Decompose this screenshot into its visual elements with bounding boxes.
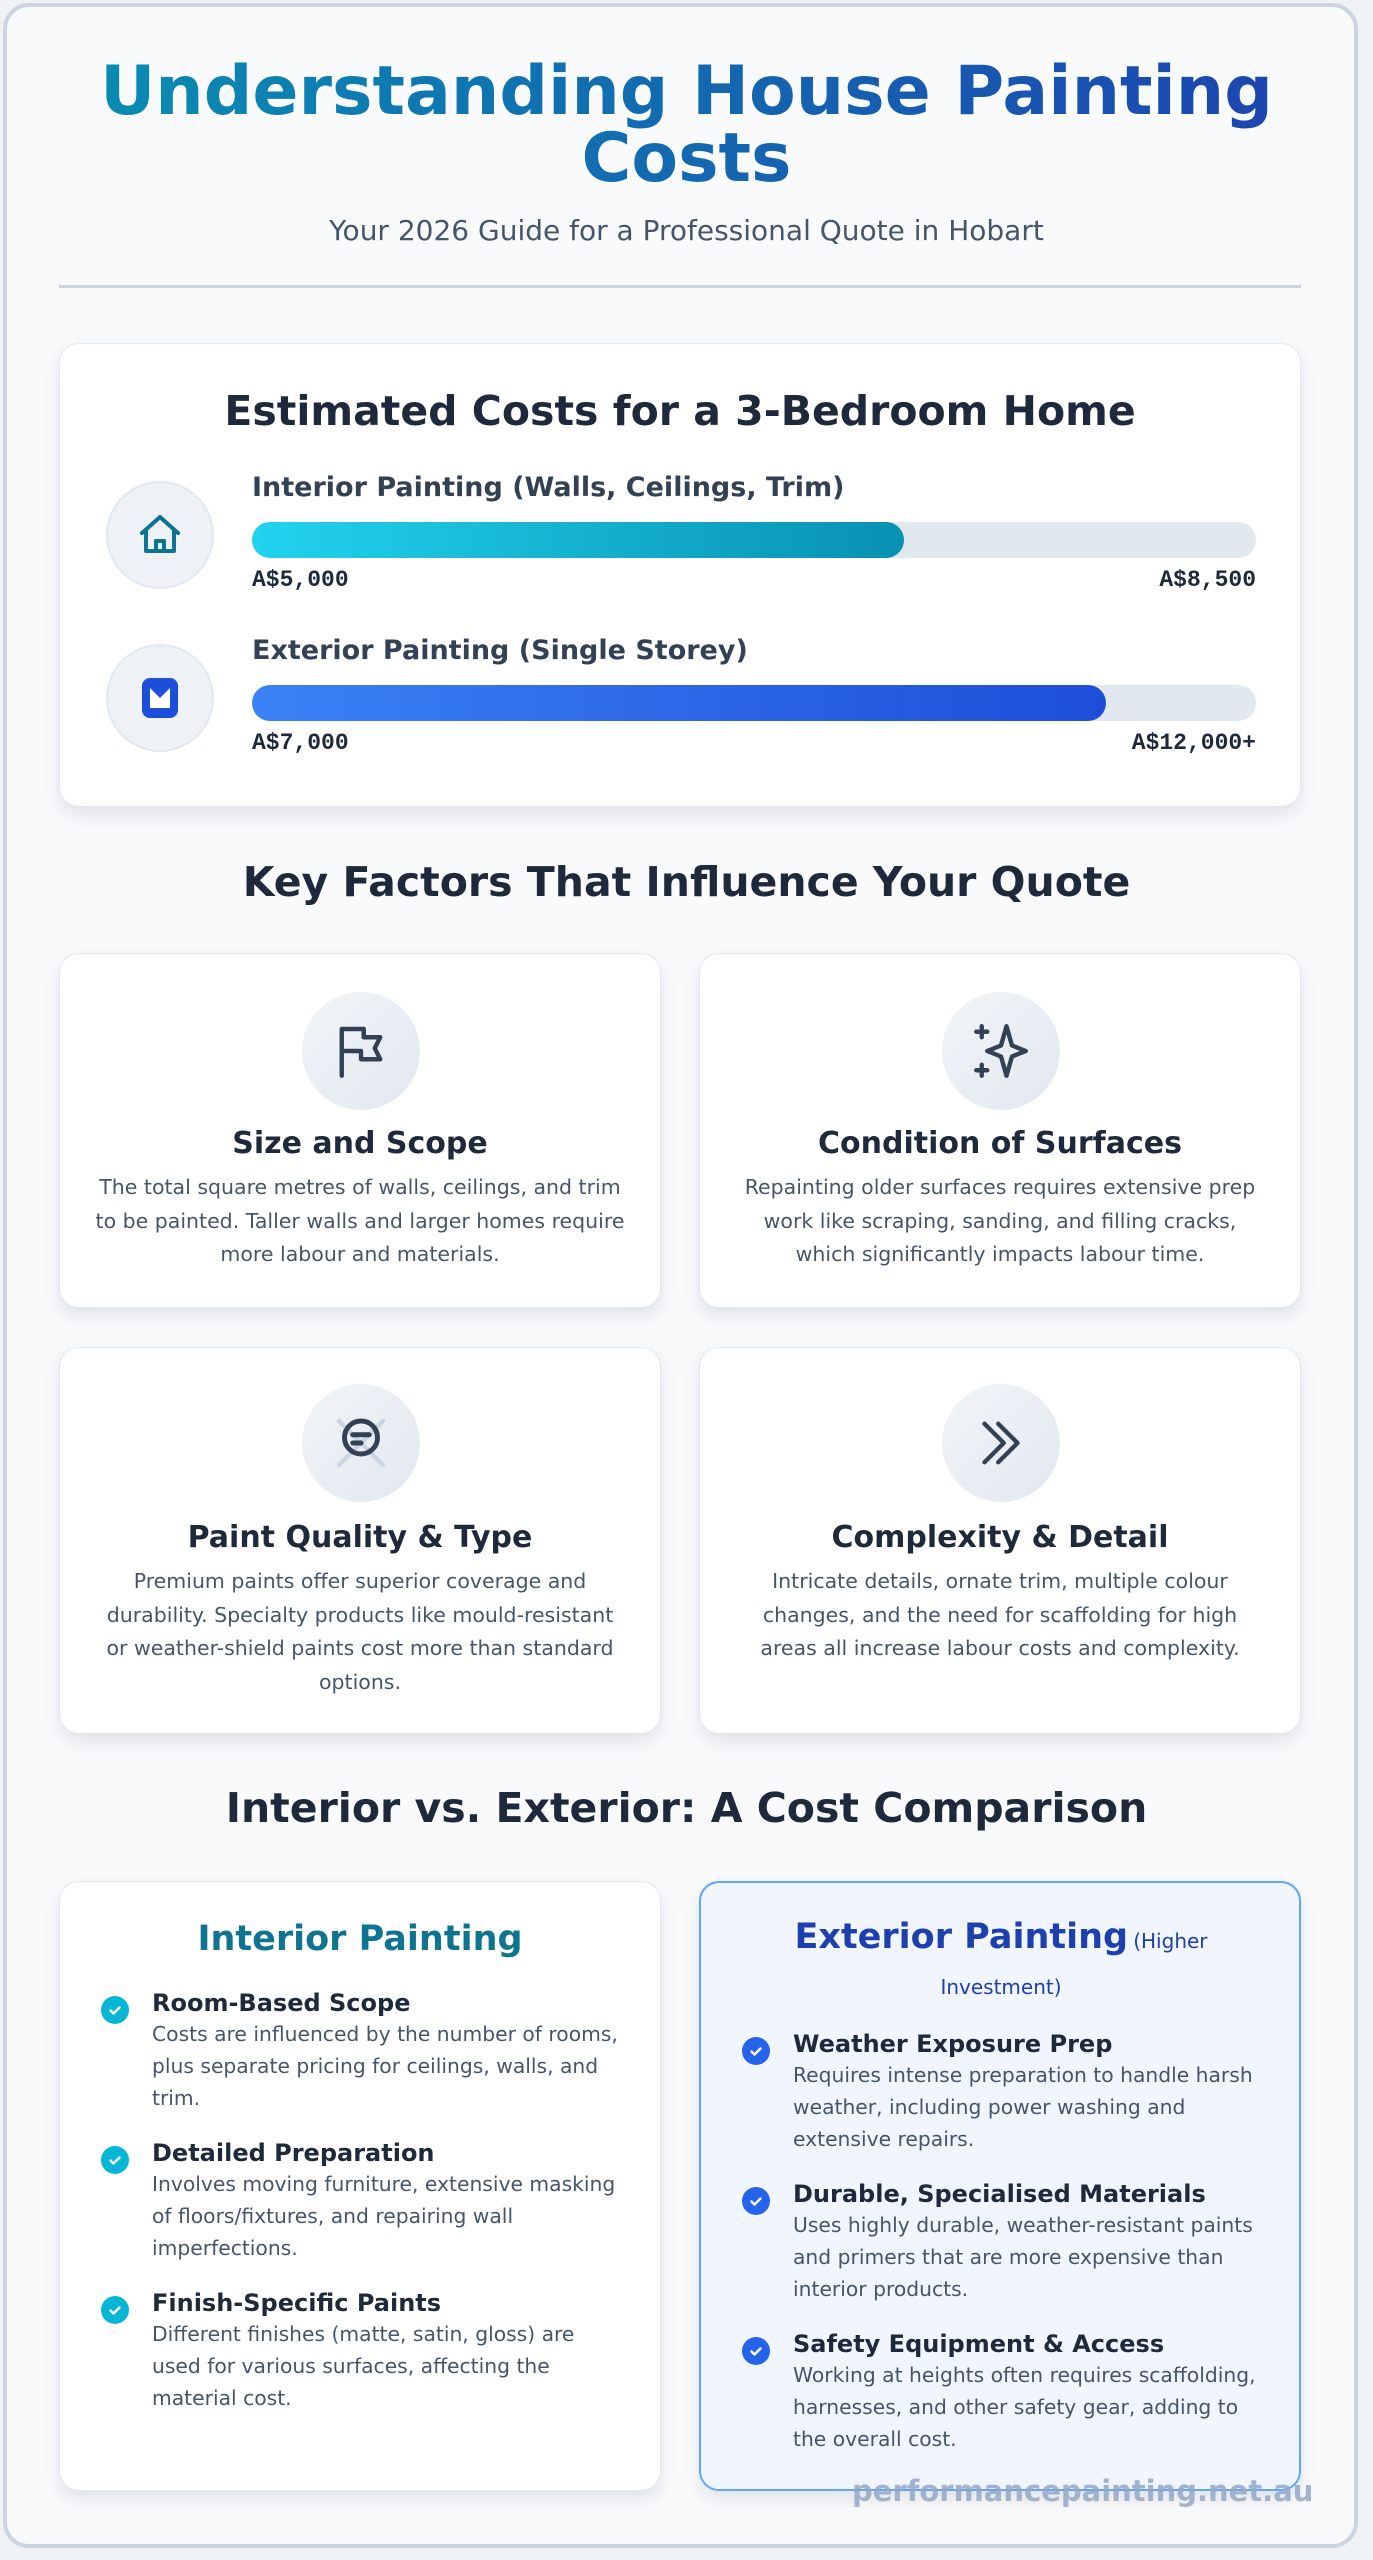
panel: condition of surfaces: [699, 953, 1301, 1308]
bar: exterior: [252, 685, 1256, 721]
item: detailed preparation: [101, 2139, 615, 2260]
panel: exterior painting: [699, 1881, 1301, 2491]
panel: exterior painting: Safety Equipment & Access: [793, 2330, 1164, 2358]
panel: exterior painting: Durable, Specialised Materials: [793, 2180, 1206, 2208]
title: Interior Painting: [197, 1919, 523, 1959]
panel: interior painting: [59, 1881, 661, 2491]
item: finish-specific paints: [101, 2289, 574, 2410]
title: Exterior Painting (Higher Investment): [794, 1917, 1208, 1999]
amounts: exterior: [252, 730, 1256, 756]
text: Premium paints offer superior coverage and durability. Specialty products like mould-resistant or weather-shield paints cost more than standard options.: [106, 1569, 614, 1694]
panel: exterior painting: Requires intense preparation to handle harsh weather, including power washing and extensive repairs.: [793, 2063, 1253, 2151]
panel: interior painting: Different finishes (matte, satin, gloss) are used for various surfaces, affecting the material cost.: [152, 2322, 574, 2410]
item: weather exposure: [742, 2030, 1253, 2151]
panel: paint quality: [59, 1347, 661, 1734]
title: Costs: [581, 119, 792, 198]
icon: flag: [302, 992, 420, 1110]
item: room-based scope: [101, 1989, 618, 2110]
icon: house: [106, 481, 214, 589]
amounts: exterior: A$12,000+: [1132, 730, 1256, 756]
text: Intricate details, ornate trim, multiple colour changes, and the need for scaffolding for high areas all increase labour costs and complexity.: [760, 1569, 1240, 1660]
label: interior: Interior Painting (Walls, Ceilings, Trim): [252, 472, 844, 503]
panel: size and scope: [59, 953, 661, 1308]
panel: interior painting: Room-Based Scope: [152, 1989, 410, 2017]
icon: sparkle: [942, 992, 1060, 1110]
subtitle: Your 2026 Guide for a Professional Quote in Hobart: [329, 214, 1044, 247]
icon: paint: [302, 1384, 420, 1502]
icon: exterior: [106, 644, 214, 752]
watermark: performancepainting.net.au: [852, 2474, 1313, 2508]
text: Repainting older surfaces requires extensive prep work like scraping, sanding, and filling cracks, which significantly impacts labour time.: [745, 1175, 1255, 1266]
title: Size and Scope: [232, 1126, 488, 1161]
title: [100, 52, 1273, 198]
panel: complexity: [699, 1347, 1301, 1734]
heading: key factors: Key Factors That Influence Your Quote: [243, 858, 1130, 906]
panel: interior painting: Finish-Specific Paints: [152, 2289, 441, 2317]
text: The total square metres of walls, ceilings, and trim to be painted. Taller walls and larger homes require more labour and materials.: [96, 1175, 624, 1266]
panel: exterior painting: Uses highly durable, weather-resistant paints and primers that are more expensive than interior products.: [793, 2213, 1253, 2301]
bar: interior: [252, 522, 1256, 558]
panel: exterior painting: Working at heights often requires scaffolding, harnesses, and other safety gear, adding to the overall cost.: [793, 2363, 1256, 2451]
amounts: interior: A$8,500: [1159, 567, 1256, 593]
title: Condition of Surfaces: [818, 1126, 1182, 1161]
panel: interior painting: Involves moving furniture, extensive masking of floors/fixtures, and repairing wall imperfections.: [152, 2172, 615, 2260]
title: Complexity & Detail: [832, 1520, 1168, 1555]
label: exterior: Exterior Painting (Single Storey): [252, 635, 748, 666]
amounts: exterior: A$7,000: [252, 730, 349, 756]
panel: estimated costs: [59, 343, 1301, 807]
amounts: interior: [252, 567, 1256, 593]
amounts: interior: A$5,000: [252, 567, 349, 593]
panel: interior painting: Detailed Preparation: [152, 2139, 435, 2167]
panel: interior painting: Costs are influenced by the number of rooms, plus separate pricing for ceilings, walls, and trim.: [152, 2022, 618, 2110]
title: Paint Quality & Type: [188, 1520, 532, 1555]
heading: comparison: Interior vs. Exterior: A Cost Comparison: [226, 1784, 1147, 1832]
icon: chevrons: [942, 1384, 1060, 1502]
item: safety equipment: [742, 2330, 1256, 2451]
panel: exterior painting: Weather Exposure Prep: [793, 2030, 1112, 2058]
title: Understanding House Painting: [100, 52, 1273, 131]
item: durable materials: [742, 2180, 1253, 2301]
heading: estimated costs: Estimated Costs for a 3-Bedroom Home: [224, 387, 1136, 435]
